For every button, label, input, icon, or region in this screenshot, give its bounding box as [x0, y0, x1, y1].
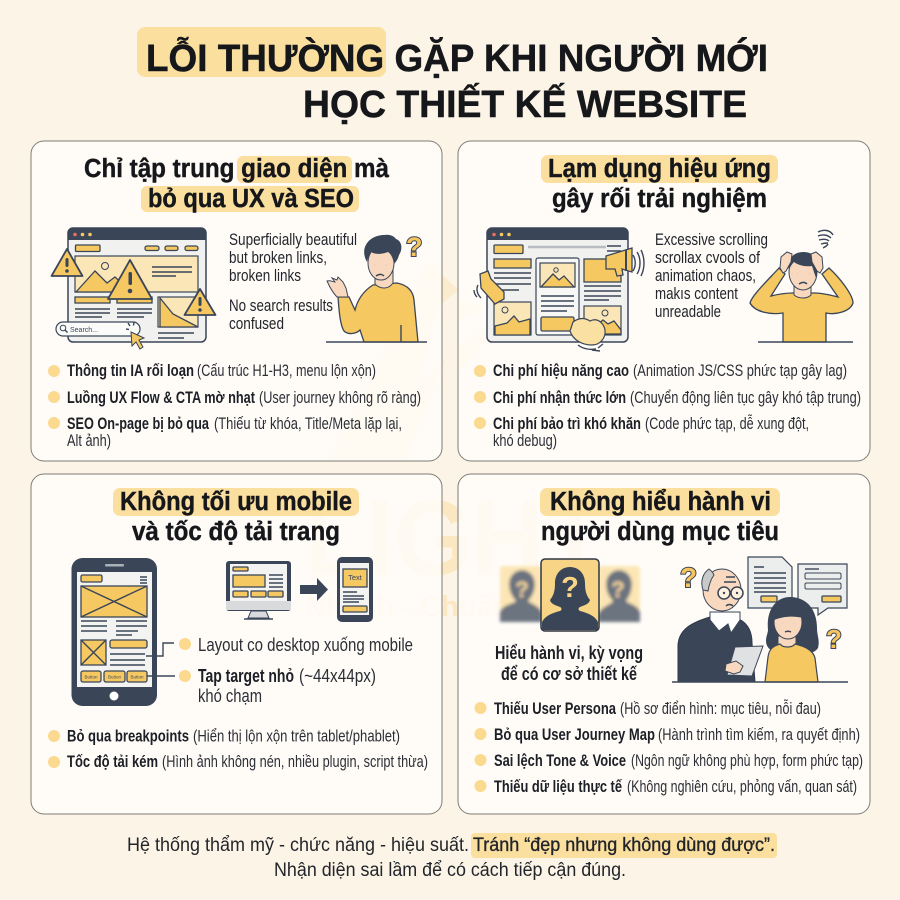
- icon: phone wireframe: Button: [108, 674, 121, 680]
- callouts: Layout co desktop xuống mobile: [198, 635, 413, 655]
- icon: stressed person: [750, 230, 853, 342]
- panel heading: [541, 155, 778, 213]
- footer summary: [127, 833, 777, 881]
- callout text: No search results: [229, 297, 333, 315]
- footer summary: Hệ thống thẩm mỹ - chức năng - hiệu suất.: [127, 835, 469, 856]
- bullet list: Chi phí nhận thức lớn: [493, 388, 626, 407]
- bullet list: (Code phức tạp, dễ xung đột,: [645, 414, 809, 433]
- callouts: Tap target nhỏ: [198, 666, 294, 686]
- icon: small phone: Text: [348, 573, 363, 582]
- bullet list: Thiếu User Persona: [494, 699, 616, 718]
- footer summary: Nhận diện sai lầm để có cách tiếp cận đúng.: [274, 860, 626, 881]
- caption text: để có cơ sở thiết kế: [501, 664, 638, 684]
- arrow: [300, 578, 328, 601]
- bullet list: Thông tin IA rối loạn: [67, 361, 194, 380]
- bullet list: (Hồ sơ điển hình: mục tiêu, nỗi đau): [620, 699, 821, 718]
- panel: only interface, ignoring UX and SEO: [31, 141, 442, 461]
- panel heading: Chỉ tập trung giao diện mà: [84, 155, 390, 183]
- footer summary: Tránh “đẹp nhưng không dùng được”.: [473, 835, 775, 856]
- callout text: scrollax cvools of: [655, 249, 760, 267]
- panel heading: [540, 488, 780, 546]
- icon: desktop to mobile: [226, 561, 291, 619]
- icon: persona cards: ?: [611, 577, 625, 602]
- bullet list: (Thiếu từ khóa, Title/Meta lặp lại,: [214, 414, 402, 433]
- panel heading: [84, 155, 390, 213]
- bullet list: Bỏ qua User Journey Map: [494, 725, 655, 744]
- panel heading: Không hiểu hành vi: [550, 488, 771, 516]
- icon: website with chaotic animation: [474, 228, 644, 351]
- icon: phone wireframe: [72, 558, 157, 706]
- bullet list: khó debug): [493, 431, 557, 450]
- callout text: makıs content: [655, 285, 738, 303]
- callouts: (~44x44px): [299, 666, 376, 686]
- bullet list: Tốc độ tải kém: [67, 752, 158, 771]
- callout text: Superficially beautiful: [229, 231, 357, 249]
- bullet list: [48, 726, 428, 771]
- callout text: [655, 231, 768, 321]
- panel heading: [113, 488, 359, 546]
- watermark: [305, 260, 605, 623]
- bullet list: Luồng UX Flow & CTA mờ nhạt: [67, 388, 255, 407]
- bullet list: (User journey không rõ ràng): [259, 388, 421, 407]
- callout text: unreadable: [655, 303, 721, 321]
- callouts: [179, 635, 413, 706]
- bullet list: [474, 699, 863, 796]
- icon: phone wireframe: Button: [130, 674, 144, 680]
- bullet list: Sai lệch Tone & Voice: [494, 751, 626, 770]
- panel heading: Lạm dụng hiệu ứng: [548, 155, 771, 183]
- icon: broken website with warnings: Search...: [70, 327, 98, 334]
- panel heading: gây rối trải nghiệm: [552, 185, 767, 213]
- icon: older man and girl with documents: [672, 557, 848, 682]
- bullet list: [474, 361, 861, 450]
- panel: overused effects: [458, 141, 870, 461]
- bullet list: [48, 361, 421, 450]
- bullet list: (Cấu trúc H1-H3, menu lộn xộn): [197, 361, 376, 380]
- icon: small phone: [337, 557, 373, 622]
- bullet list: Chi phí bảo trì khó khăn: [493, 414, 641, 433]
- panel: no mobile optimisation: [31, 474, 442, 814]
- icon: persona cards: ?: [515, 577, 529, 602]
- callout text: Excessive scrolling: [655, 231, 768, 249]
- title: HỌC THIẾT KẾ WEBSITE: [303, 82, 747, 126]
- panel heading: Không tối ưu mobile: [120, 488, 352, 516]
- bullet list: Thiếu dữ liệu thực tế: [494, 777, 622, 796]
- title: [137, 27, 768, 126]
- bullet list: Bỏ qua breakpoints: [67, 726, 189, 746]
- icon: confused person: [326, 232, 427, 342]
- callouts: khó chạm: [198, 686, 262, 706]
- bullet list: SEO On-page bị bỏ qua: [67, 414, 209, 433]
- caption text: Hiểu hành vi, kỳ vọng: [495, 643, 643, 663]
- panel heading: và tốc độ tải trang: [132, 518, 340, 546]
- icon: persona cards: ?: [561, 572, 579, 604]
- watermark: LIGHT: [305, 477, 605, 598]
- icon: broken website with warnings: [52, 228, 216, 349]
- title: LỖI THƯỜNG GẶP KHI NGƯỜI MỚI: [146, 35, 768, 80]
- icon: persona cards: [500, 559, 640, 631]
- icon: confused person: ?: [406, 232, 422, 262]
- bullet list: (Hình ảnh không nén, nhiều plugin, script thừa): [162, 752, 428, 771]
- icon: older man and girl with documents: ?: [680, 562, 697, 593]
- bullet list: (Hiển thị lộn xộn trên tablet/phablet): [193, 726, 400, 746]
- panel heading: người dùng mục tiêu: [541, 518, 779, 546]
- caption text: [495, 643, 643, 684]
- callout text: [229, 231, 357, 333]
- icon: older man and girl with documents: ?: [826, 624, 842, 654]
- panel: not understanding target users: [458, 474, 870, 814]
- icon: phone wireframe: Button: [84, 674, 98, 680]
- connector lines: [146, 643, 175, 676]
- panel heading: bỏ qua UX và SEO: [148, 185, 354, 213]
- callout text: confused: [229, 315, 284, 333]
- callout text: but broken links,: [229, 249, 327, 267]
- callout text: animation chaos,: [655, 267, 756, 285]
- bullet list: Alt ảnh): [67, 431, 111, 450]
- callout text: broken links: [229, 267, 301, 285]
- watermark: Nhanh - Chuẩn - Đẹp: [305, 591, 590, 623]
- bullet list: Chi phí hiệu năng cao: [493, 361, 629, 380]
